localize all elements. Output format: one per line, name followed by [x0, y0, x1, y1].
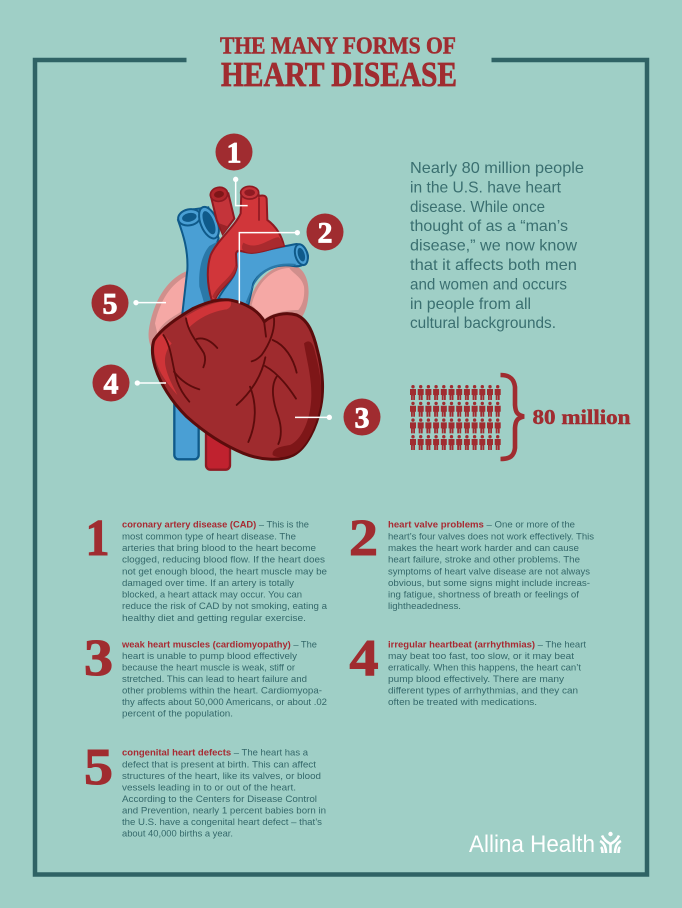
intro text: disease,” we now know: [410, 238, 577, 255]
section 5: congenital heart defects: According to the Centers for Disease Control: [122, 794, 317, 804]
section 4: irregular heartbeat: may beat too fast, too slow, or it may beat: [388, 651, 574, 661]
icon: logo mark: [600, 832, 621, 853]
badge 1: 1: [226, 136, 242, 170]
intro text: Nearly 80 million people: [410, 160, 584, 177]
logo: Allina Health: Allina Health: [469, 831, 595, 858]
section 3: weak heart muscles: heart is unable to pump blood effectively: [122, 651, 297, 661]
badge 3: [344, 398, 380, 436]
connector lines: [136, 179, 329, 417]
section 3: weak heart muscles: [84, 630, 327, 719]
section 4: irregular heartbeat: often be treated with medications.: [388, 697, 537, 707]
section 2: heart valve problems: [349, 510, 594, 611]
badge 1: [216, 134, 252, 170]
section 4: irregular heartbeat: irregular heartbeat (arrhythmias) – The heart: [388, 640, 586, 650]
badge 5: [92, 284, 128, 322]
80 million label: 80 million: [532, 405, 631, 429]
intro text: disease. While once: [410, 199, 545, 216]
section 2: heart valve problems: obvious, but some signs might include increas-: [388, 578, 590, 588]
title: THE MANY FORMS OF: [220, 32, 456, 60]
section 1: coronary artery disease: clogged, reducing blood flow. If the heart does: [122, 555, 325, 565]
section 2: heart valve problems: lightheadedness.: [388, 601, 461, 611]
intro text: and women and occurs: [410, 276, 567, 293]
section 1: coronary artery disease: blocked, a heart attack may occur. You can: [122, 590, 302, 600]
section 2: heart valve problems: heart valve problems – One or more of the: [388, 520, 575, 530]
section 1: coronary artery disease: 1: [86, 510, 110, 567]
section 3: weak heart muscles: 3: [84, 630, 113, 687]
section 1: coronary artery disease: coronary artery disease (CAD) – This is the: [122, 520, 309, 530]
section 5: congenital heart defects: [84, 739, 326, 838]
section 2: heart valve problems: 2: [349, 510, 378, 567]
intro text: [410, 160, 584, 332]
badge 3: 3: [354, 402, 370, 434]
section 4: irregular heartbeat: erratically. When this happens, the heart can’t: [388, 663, 581, 673]
intro text: in people from all: [410, 296, 531, 313]
section 5: congenital heart defects: congenital heart defects – The heart has a: [122, 748, 309, 758]
section 3: weak heart muscles: thy affects about 50,000 Americans, or about .02: [122, 697, 327, 707]
people pictogram: [410, 385, 501, 450]
intro text: thought of as a “man’s: [410, 218, 568, 235]
badge 2: [306, 214, 344, 250]
section 4: irregular heartbeat: different types of arrhythmias, and they can: [388, 686, 578, 696]
section 1: coronary artery disease: reduce the risk of CAD by not smoking, eating a: [122, 601, 328, 611]
intro text: cultural backgrounds.: [410, 315, 556, 332]
section 1: coronary artery disease: most common type of heart disease. The: [122, 531, 296, 541]
intro text: that it affects both men: [410, 257, 577, 274]
section 2: heart valve problems: symptoms of heart valve disease are not always: [388, 566, 590, 576]
section 4: irregular heartbeat: pump blood effectively. There are many: [388, 674, 564, 684]
section 5: congenital heart defects: about 40,000 births a year.: [122, 828, 233, 838]
badge 2: 2: [318, 216, 332, 250]
section 3: weak heart muscles: other problems within the heart. Cardiomyopa-: [122, 686, 322, 696]
section 3: weak heart muscles: stretched. This can lead to heart failure and: [122, 674, 307, 684]
title: [220, 32, 457, 94]
section 4: irregular heartbeat: 4: [350, 630, 378, 687]
section 1: coronary artery disease: healthy diet and getting regular exercise.: [122, 613, 306, 623]
section 5: congenital heart defects: structures of the heart, like its valves, or blood: [122, 771, 321, 781]
section 2: heart valve problems: heart failure, stroke and other problems. The: [388, 555, 580, 565]
title: HEART DISEASE: [221, 56, 457, 94]
badge 4: 4: [104, 368, 118, 400]
section 3: weak heart muscles: because the heart muscle is weak, stiff or: [122, 663, 295, 673]
brace: [500, 375, 524, 459]
section 4: irregular heartbeat: [350, 630, 586, 707]
section 1: coronary artery disease: arteries that bring blood to the heart become: [122, 543, 316, 553]
section 5: congenital heart defects: 5: [84, 739, 113, 796]
section 2: heart valve problems: makes the heart work harder and can cause: [388, 543, 579, 553]
section 5: congenital heart defects: and Prevention, nearly 1 percent babies born in: [122, 806, 326, 816]
section 3: weak heart muscles: percent of the population.: [122, 709, 233, 719]
section 1: coronary artery disease: damaged over time. If an artery is totally: [122, 578, 294, 588]
section 5: congenital heart defects: vessels leading in to or out of the heart.: [122, 782, 296, 792]
badge 4: [92, 364, 130, 402]
heart illustration: [133, 177, 332, 470]
section 2: heart valve problems: heart’s four valves does not work effectively. This: [388, 531, 594, 541]
section 3: weak heart muscles: weak heart muscles (cardiomyopathy) – The: [121, 640, 317, 650]
section 1: coronary artery disease: [86, 510, 328, 623]
section 5: congenital heart defects: defect that is present at birth. This can affect: [122, 759, 316, 769]
badge 5: 5: [102, 288, 118, 320]
section 1: coronary artery disease: not get enough blood, the heart muscle may be: [122, 566, 327, 576]
section 2: heart valve problems: ing fatigue, shortness of breath or feelings of: [388, 590, 579, 600]
intro text: in the U.S. have heart: [410, 179, 562, 196]
section 5: congenital heart defects: the U.S. have a congenital heart defect – that’s: [122, 817, 322, 827]
